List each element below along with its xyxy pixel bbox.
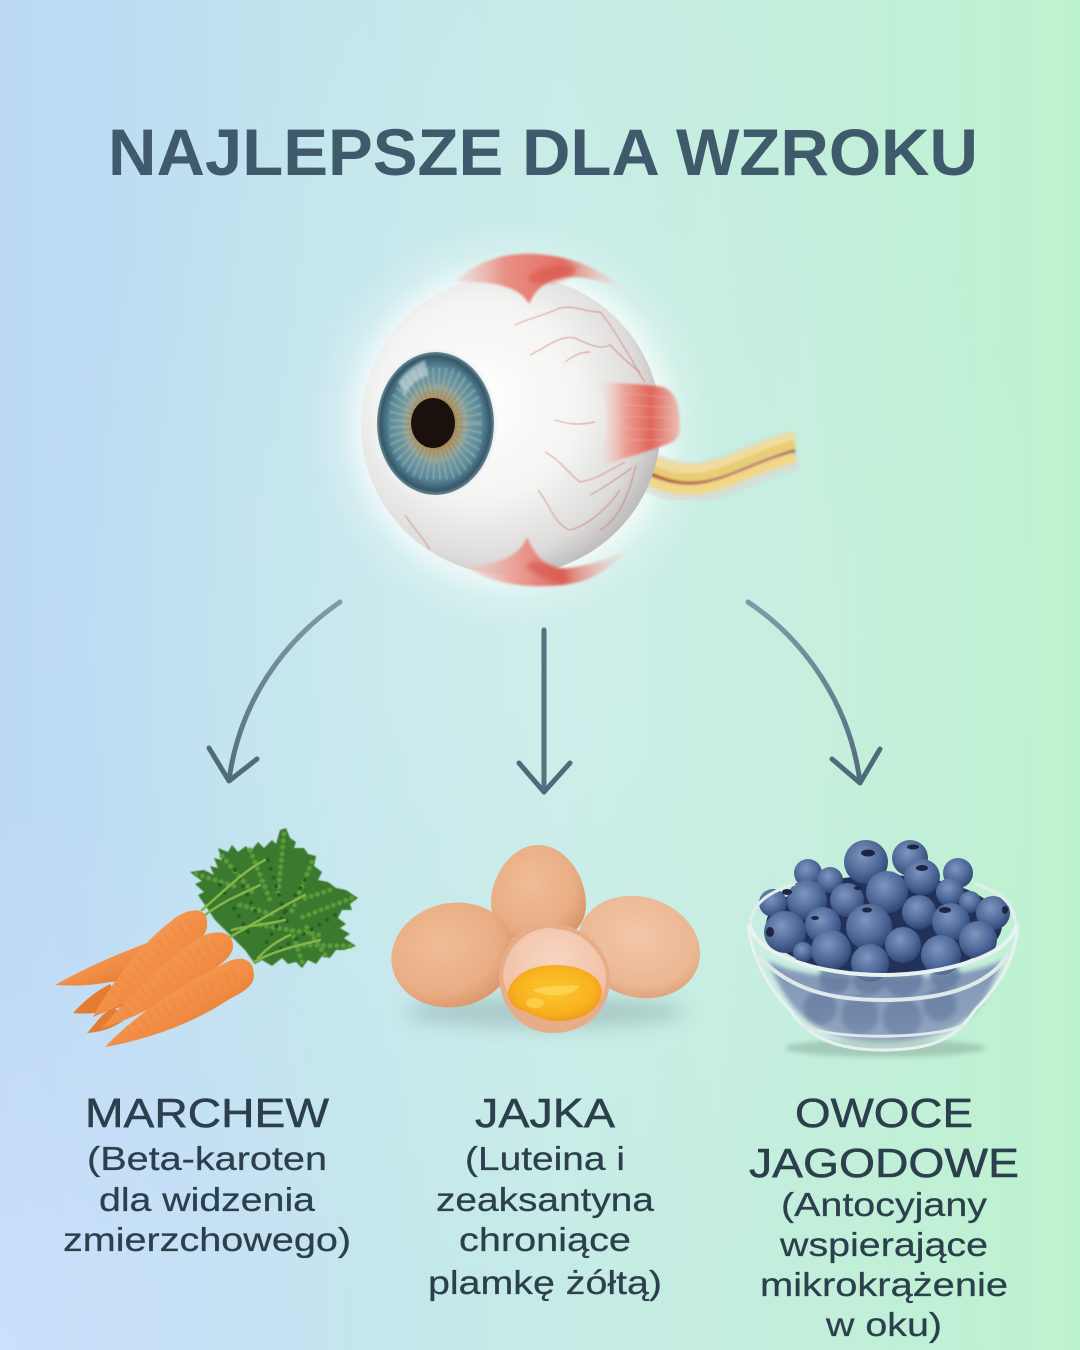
blueberry mound	[766, 875, 1002, 975]
arrow: right	[748, 602, 880, 783]
carrot roots	[55, 943, 155, 986]
arrow: left	[209, 602, 340, 781]
stems	[202, 860, 320, 962]
blueberry calyx marks	[766, 844, 1008, 937]
label: jajka: JAJKA	[475, 1090, 616, 1136]
top muscle	[455, 254, 622, 304]
label: jajka: (Luteina i	[465, 1140, 625, 1177]
eyeball	[361, 275, 661, 575]
label: owoce jagodowe: OWOCE	[795, 1090, 973, 1136]
illustration: blueberries in bowl	[748, 840, 1018, 1057]
iris	[374, 350, 496, 498]
label: jajka: plamkę żółtą)	[428, 1264, 662, 1301]
cracked egg	[499, 924, 610, 1033]
label: jajka	[428, 1090, 662, 1301]
veins	[405, 307, 645, 550]
lower berries seen through glass	[768, 958, 1002, 1042]
carrot stripes	[115, 922, 240, 1033]
illustration: carrots	[55, 828, 358, 1047]
label: jajka: zeaksantyna	[436, 1181, 655, 1218]
label: owoce jagodowe: wspierające	[779, 1226, 988, 1263]
label: jajka: chroniące	[459, 1221, 631, 1258]
carrot leaves	[190, 828, 358, 968]
label: marchew: dla widzenia	[99, 1181, 316, 1218]
right muscle	[593, 380, 680, 467]
label: marchew: zmierzchowego)	[63, 1221, 351, 1258]
label: marchew: MARCHEW	[85, 1090, 329, 1136]
glass bowl	[748, 884, 1018, 1050]
label: marchew: (Beta-karoten	[87, 1140, 327, 1177]
label: marchew	[63, 1090, 351, 1258]
title: NAJLEPSZE DLA WZROKU	[108, 115, 978, 189]
label: owoce jagodowe: mikrokrążenie	[760, 1266, 1008, 1303]
label: owoce jagodowe: JAGODOWE	[749, 1140, 1019, 1186]
arrow: centre	[519, 630, 570, 792]
illustration: eggs	[382, 845, 713, 1033]
label: owoce jagodowe	[749, 1090, 1019, 1343]
label: owoce jagodowe: (Antocyjany	[781, 1186, 988, 1223]
illustration: anatomical eye	[307, 220, 795, 630]
bottom muscle	[465, 537, 632, 586]
label: owoce jagodowe: w oku)	[825, 1306, 942, 1343]
optic nerve	[650, 436, 795, 490]
